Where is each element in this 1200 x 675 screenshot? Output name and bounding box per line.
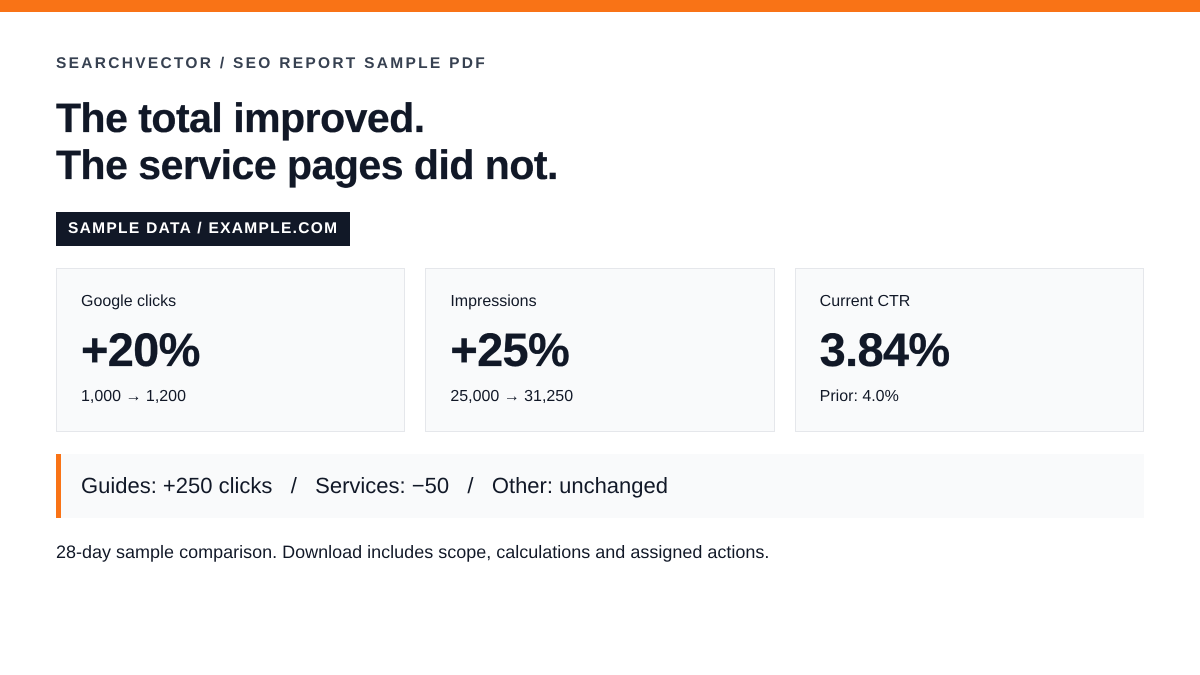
label: Google clicks <box>81 293 176 310</box>
callout: segment changes <box>56 454 1144 518</box>
label: Impressions <box>450 293 537 310</box>
footnote: 28-day sample comparison. Download includes scope, calculations and assigned actions. <box>56 542 769 562</box>
title: The service pages did not. <box>56 142 558 188</box>
title <box>56 95 558 188</box>
card: Google clicks <box>56 268 405 432</box>
value: +25% <box>450 323 569 376</box>
top orange bar <box>0 0 1200 12</box>
sample data badge <box>56 212 350 246</box>
card: Current CTR <box>795 268 1144 432</box>
detail: 1,000 → 1,200 <box>81 388 186 405</box>
value: 3.84% <box>820 323 949 376</box>
detail: 25,000 → 31,250 <box>450 388 573 405</box>
detail: Prior: 4.0% <box>820 388 899 405</box>
eyebrow: SEARCHVECTOR / SEO REPORT SAMPLE PDF <box>56 55 487 72</box>
callout: segment changes: Guides: +250 clicks / Services: −50 / Other: unchanged <box>81 473 668 498</box>
card: Impressions <box>425 268 775 432</box>
title: The total improved. <box>56 95 425 141</box>
sample data badge: SAMPLE DATA / EXAMPLE.COM <box>68 220 338 237</box>
label: Current CTR <box>820 293 910 310</box>
value: +20% <box>81 323 200 376</box>
